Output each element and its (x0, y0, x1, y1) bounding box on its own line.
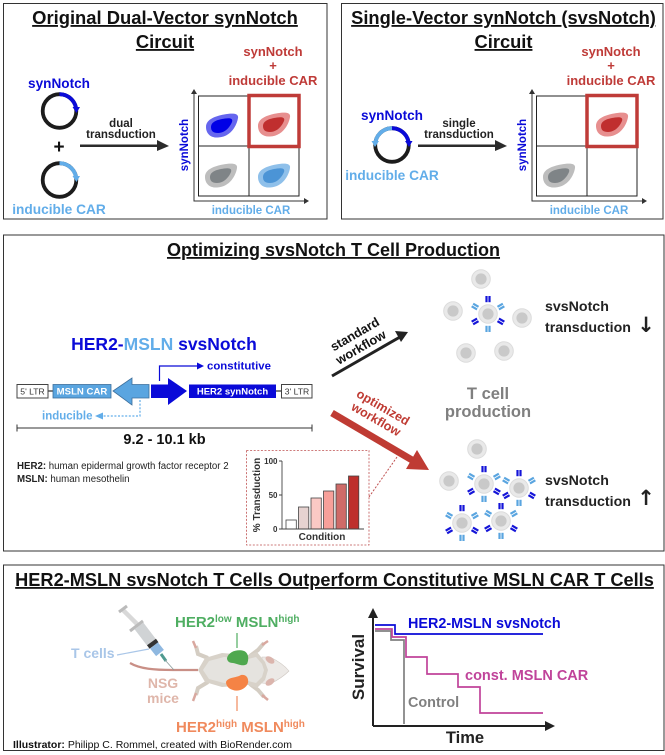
label: HER2 low tumor (175, 614, 299, 648)
label: dual transduction: transduction (86, 129, 156, 141)
title: dual-vector: Original Dual-Vector synNotch (32, 7, 298, 28)
bar chart: Condition (299, 532, 345, 543)
abbreviations: HER2: human epidermal growth factor receptor 2 (17, 461, 229, 472)
survival chart: Time (446, 729, 484, 747)
label: NSG mice: NSG (148, 675, 178, 691)
title: optimizing: Optimizing svsNotch T Cell Production (167, 240, 500, 260)
construct title: HER2-MSLN svsNotch (71, 334, 257, 354)
plus sign: + (53, 137, 65, 158)
label: optimized workflow: workflow (348, 399, 403, 439)
bar chart: 100 (264, 457, 278, 466)
label: HER2 low tumor: HER2 (175, 614, 215, 631)
label: NSG mice (147, 675, 179, 706)
survival chart: const. MSLN CAR (465, 668, 589, 684)
label: transduction down: svsNotch (545, 299, 609, 315)
label: standard workflow: standard (328, 314, 382, 354)
size label: 9.2 - 10.1 kb (123, 432, 206, 448)
label: T cell production: production (445, 403, 531, 421)
label: HER2 high tumor: MSLN (237, 719, 284, 736)
illustration: syringe (119, 606, 174, 670)
title line 2: Circuit (475, 31, 532, 52)
promoter: inducible (42, 400, 140, 422)
label: single transduction: transduction (424, 129, 494, 141)
arrow: optimized workflow (332, 413, 429, 470)
plasmid: single vector (372, 128, 412, 162)
label: transduction down (545, 299, 655, 337)
label: synNotch plus inducible CAR: synNotch (581, 44, 641, 59)
label: dual transduction (86, 118, 156, 141)
survival chart (349, 608, 589, 747)
panel: optimizing production (4, 235, 664, 551)
abbreviations: MSLN: human mesothelin (17, 474, 130, 485)
bar chart: 50 (269, 491, 278, 500)
vector map: 3' LTR (285, 386, 309, 396)
arrow: standard workflow (332, 331, 408, 376)
label: T cell production: T cell (467, 385, 509, 403)
axis label: inducible CAR: inducible CAR (212, 205, 291, 217)
quadrant plot (529, 89, 647, 204)
label: synNotch plus inducible CAR: inducible CAR (567, 73, 656, 88)
credit: Illustrator: Philipp C. Rommel, created with BioRender.com (13, 739, 292, 751)
quadrant plot (191, 89, 309, 204)
label: transduction down: transduction (545, 320, 631, 336)
size bar (17, 424, 312, 432)
T cells: standard (444, 270, 531, 362)
title: outcome: HER2-MSLN svsNotch T Cells Outperform Constitutive MSLN CAR T Cells (15, 570, 654, 590)
label: NSG mice: mice (147, 690, 179, 706)
axis label: synNotch: synNotch (179, 119, 191, 171)
promoter: constitutive: constitutive (207, 360, 271, 372)
plasmid: synNotch (43, 94, 80, 128)
label: transduction up: transduction (545, 494, 631, 510)
label: synNotch plus inducible CAR: + (269, 58, 277, 73)
label: HER2 high tumor: high (284, 719, 305, 730)
promoter: constitutive (160, 360, 271, 381)
vector map: MSLN CAR (57, 386, 107, 398)
label: synNotch plus inducible CAR (567, 44, 656, 88)
bar chart: % Transduction (252, 458, 263, 532)
vector map: 5' LTR (20, 386, 45, 396)
bar chart (252, 457, 364, 543)
label: T cell production (445, 385, 531, 421)
T cells: optimized (440, 440, 536, 541)
label: single transduction (424, 118, 494, 141)
vector map: HER2 synNotch (197, 386, 268, 398)
label: dual transduction: dual (109, 118, 133, 130)
label: inducible CAR: inducible CAR (12, 202, 106, 217)
panel: original dual-vector circuit (4, 4, 327, 219)
panel: single-vector circuit (342, 4, 663, 219)
survival chart: HER2-MSLN svsNotch (408, 616, 561, 632)
label: HER2 low tumor: high (278, 614, 299, 625)
label: transduction down: ↓ (637, 313, 655, 337)
label: HER2 low tumor: low (215, 614, 232, 625)
label: HER2 high tumor: HER2 (176, 719, 216, 736)
title: single-vector: Single-Vector synNotch (svsNotch) (351, 7, 656, 28)
dotted connector (369, 457, 397, 497)
survival chart: Survival (349, 634, 368, 700)
illustration: mouse (130, 641, 289, 701)
label: standard workflow: workflow (332, 327, 389, 368)
bar chart: 0 (273, 525, 278, 534)
plasmid: inducible CAR (43, 163, 80, 197)
label: synNotch plus inducible CAR (229, 44, 318, 88)
label: synNotch plus inducible CAR: synNotch (243, 44, 303, 59)
label: T cells: T cells (71, 645, 115, 661)
label: T cells (71, 645, 149, 661)
label: synNotch: synNotch (28, 76, 90, 91)
label: single transduction: single (442, 118, 476, 130)
label: HER2 low tumor: MSLN (232, 614, 278, 631)
label: inducible CAR: inducible CAR (345, 168, 439, 183)
arrow: single transduction (418, 140, 507, 151)
arrow: dual transduction (80, 140, 169, 151)
label: standard workflow (328, 314, 389, 368)
label: synNotch plus inducible CAR: + (607, 58, 615, 73)
panel: in vivo outcome (4, 565, 664, 751)
label: transduction up (545, 473, 655, 510)
label: HER2 high tumor (176, 696, 305, 736)
label: transduction up: ↑ (637, 486, 655, 510)
survival chart: Control (408, 695, 459, 711)
label: synNotch plus inducible CAR: inducible CAR (229, 73, 318, 88)
axis label: inducible CAR: inducible CAR (550, 205, 629, 217)
label: HER2 high tumor: high (216, 719, 237, 730)
label: synNotch: synNotch (361, 108, 423, 123)
title line 2: Circuit (136, 31, 194, 52)
dotted callout box (246, 450, 369, 545)
abbreviations (17, 461, 229, 485)
label: optimized workflow: optimized (354, 387, 412, 428)
axis label: synNotch: synNotch (517, 119, 529, 171)
promoter: inducible: inducible (42, 410, 92, 422)
vector map (17, 378, 312, 405)
label: transduction up: svsNotch (545, 473, 609, 489)
